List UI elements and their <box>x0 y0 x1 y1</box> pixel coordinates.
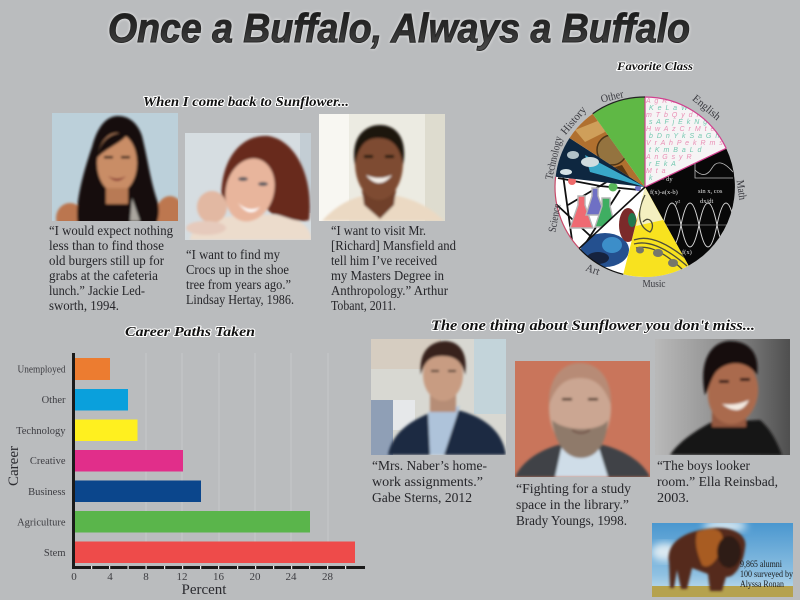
slice: English: t K m B a L d <box>649 147 702 154</box>
value tick labels: 20 <box>250 571 261 583</box>
photo: bison with survey note <box>652 523 793 597</box>
bar: Creative 12 <box>75 450 183 472</box>
category labels: Agriculture <box>17 518 66 528</box>
quote: Lindsay Hertay: Crocs up in the shoe <box>186 262 289 277</box>
slice: English: A n G s y R <box>645 154 693 161</box>
slice: Music <box>623 188 688 277</box>
category labels: Technology <box>16 426 66 437</box>
slice: English: K e L a W h n A r g <box>649 105 726 112</box>
slice: Science <box>558 177 641 242</box>
quote: Jackie Ledsworth: “I would expect nothing <box>49 223 173 238</box>
survey note: 9,865 alumni <box>740 559 782 569</box>
quote: Brady Youngs: space in the library.” <box>516 498 629 513</box>
quote: Lindsay Hertay: tree from years ago.” <box>186 277 291 292</box>
slice labels: Music <box>642 278 666 290</box>
category labels <box>16 364 66 559</box>
quote: Arthur Tobant: Anthropology.” Arthur <box>331 283 448 298</box>
pie chart: favorite class <box>543 88 748 290</box>
quote: Ella Reinsbad: 2003. <box>657 491 689 506</box>
heading: career paths: Career Paths Taken <box>125 325 255 340</box>
axis title: Career: Career <box>6 446 22 486</box>
slice labels: History <box>559 104 589 137</box>
quote: Arthur Tobant: [Richard] Mansfield and <box>331 238 456 253</box>
bar: Stem 31 <box>75 542 355 563</box>
slice labels: Technology <box>543 135 565 181</box>
quote: Arthur Tobant <box>331 223 456 313</box>
slice: History <box>570 114 644 186</box>
quote: Arthur Tobant: tell him I’ve received <box>331 253 437 268</box>
slice: English: V r A h P e k R m s <box>646 140 724 147</box>
value tick labels <box>71 571 334 583</box>
slice: Math: f = dy <box>657 176 673 183</box>
quote: Gabe Sterns: work assignments.” <box>372 475 483 490</box>
photo: Arthur Tobant <box>319 114 445 221</box>
quote: Gabe Sterns <box>372 459 487 506</box>
slice: English: s A F j E k N g t M <box>649 119 724 126</box>
title: Once a Buffalo, Always a Buffalo <box>108 5 690 51</box>
quote: Ella Reinsbad: room.” Ella Reinsbad, <box>657 475 778 490</box>
quote: Gabe Sterns: Gabe Sterns, 2012 <box>372 491 472 506</box>
slice labels: Other <box>600 88 625 106</box>
slice: Math: dx/dt <box>700 198 714 205</box>
quote: Arthur Tobant: “I want to visit Mr. <box>331 223 426 238</box>
photo: Brady Youngs <box>515 361 650 477</box>
quote: Jackie Ledsworth <box>49 223 173 313</box>
slice: Math: y² <box>675 199 680 206</box>
category labels: Stem <box>44 548 66 559</box>
quote: Arthur Tobant: Tobant, 2011. <box>331 298 396 313</box>
slice labels: English <box>690 93 723 123</box>
quote: Lindsay Hertay: “I want to find my <box>186 247 280 262</box>
bar: Technology 7 <box>75 420 138 441</box>
value tick labels: 0 <box>71 571 77 583</box>
slice: Math <box>646 148 735 266</box>
slice: English: H w A z C r M t e b <box>646 126 723 133</box>
slice: English: A g R k M b t s e a <box>645 98 722 105</box>
category labels: Other <box>42 395 66 406</box>
value tick labels: 16 <box>213 571 224 583</box>
slice: Other <box>593 97 645 187</box>
value tick labels: 8 <box>143 571 149 583</box>
slice: English: k <box>649 175 654 182</box>
slice: Technology <box>556 138 644 187</box>
value tick labels: 12 <box>176 571 188 583</box>
category labels: Unemployed <box>18 364 66 376</box>
quote: Ella Reinsbad <box>657 459 778 506</box>
bar: Unemployed 4 <box>75 358 110 380</box>
slice: Math: sin x, cos <box>698 188 723 195</box>
bar: Business 14 <box>75 480 201 502</box>
slice: Math: f(x) <box>682 249 692 256</box>
quote: Jackie Ledsworth: sworth, 1994. <box>49 298 119 313</box>
quote: Jackie Ledsworth: lunch.” Jackie Led- <box>49 283 145 298</box>
survey note <box>740 559 793 589</box>
quote: Gabe Sterns: “Mrs. Naber’s home- <box>372 459 487 474</box>
photo: Ella Reinsbad <box>660 339 790 455</box>
photo: Jackie Ledsworth <box>52 113 178 221</box>
slice: English: M t a <box>646 168 667 175</box>
slice: English: r E k A <box>649 161 677 168</box>
bar chart: career paths <box>6 353 365 598</box>
value tick labels: 4 <box>107 571 113 583</box>
quote: Arthur Tobant: my Masters Degree in <box>331 268 444 283</box>
quote: Lindsay Hertay <box>186 247 294 307</box>
value tick labels: 24 <box>286 571 297 583</box>
slice: Math: f(x)-a(x-b) <box>650 189 678 196</box>
category labels: Business <box>28 487 66 498</box>
slice labels: Math <box>734 179 748 201</box>
slice: English: b D n Y k S a G h A <box>649 133 729 140</box>
quote: Jackie Ledsworth: less than to find those <box>49 238 164 253</box>
survey note: Alyssa Ronan <box>740 579 784 589</box>
bar: Other 6 <box>75 389 128 410</box>
quote: Lindsay Hertay: Lindsay Hertay, 1986. <box>186 292 294 307</box>
quote: Brady Youngs: Brady Youngs, 1998. <box>516 514 627 529</box>
slice: English: m T b Q y d R p A k <box>646 112 726 119</box>
slice labels: Art <box>584 262 601 278</box>
value tick labels: 28 <box>322 571 334 583</box>
slice: English <box>646 98 725 186</box>
quote: Brady Youngs <box>516 482 631 529</box>
category labels: Creative <box>30 456 66 467</box>
heading: favorite class: Favorite Class <box>616 61 694 73</box>
quote: Ella Reinsbad: “The boys looker <box>657 459 750 474</box>
slice labels: Science <box>547 203 563 233</box>
heading: the one thing: The one thing about Sunflower you don't miss... <box>431 318 755 334</box>
heading: when I come back: When I come back to Sunflower... <box>143 95 349 110</box>
slice: Art <box>581 188 645 274</box>
slice labels <box>543 88 748 290</box>
bar: Agriculture 26 <box>75 511 310 532</box>
quote: Jackie Ledsworth: old burgers still up for <box>49 253 164 268</box>
photo: Lindsay Hertay <box>185 133 311 240</box>
quote: Brady Youngs: “Fighting for a study <box>516 482 631 497</box>
quote: Jackie Ledsworth: grabs at the cafeteria <box>49 268 158 283</box>
axis title: Percent: Percent <box>182 582 227 598</box>
axes <box>72 353 365 569</box>
photo: Gabe Sterns <box>371 339 506 455</box>
